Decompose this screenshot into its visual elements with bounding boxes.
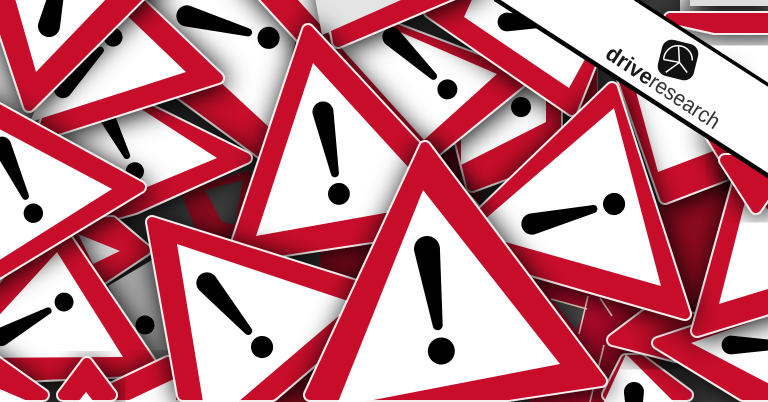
sign: upper centre with exclamation mark — [232, 30, 484, 258]
sign: small red rounded tips — [613, 312, 700, 356]
sign: band under banner with mark — [430, 0, 640, 110]
banner — [495, 0, 768, 177]
sign: bottom right with mark — [658, 296, 768, 400]
sign: far top band — [310, 0, 480, 42]
sign: mark ten upper right of centre — [240, 0, 525, 165]
sign: top centre with exclamation mark — [70, 0, 345, 168]
sign: pointing right upper left — [30, 0, 218, 134]
icon: exclamation mark — [192, 268, 278, 363]
sign: grey back with dot — [108, 260, 175, 390]
icon: exclamation mark — [624, 382, 644, 402]
logo wordmark: driveresearch — [601, 40, 725, 134]
sign: big centre with exclamation mark — [310, 147, 601, 402]
sign: top right tip — [708, 130, 768, 208]
icon: exclamation mark — [0, 289, 77, 350]
icon: exclamation mark — [412, 234, 457, 366]
icon: exclamation mark — [174, 3, 282, 51]
sign: centre right with dot — [440, 50, 556, 186]
icon: exclamation mark — [50, 24, 126, 102]
sign: small right vertical band — [574, 56, 592, 112]
sign: lower left with exclamation mark — [0, 222, 155, 380]
sign: bottom left corner — [0, 336, 43, 402]
sign: centre left pointing right — [20, 50, 246, 240]
icon: exclamation mark — [519, 191, 627, 237]
sign: bottom band right of small sign — [105, 362, 195, 402]
icon: exclamation mark — [91, 97, 147, 184]
icon: exclamation mark — [498, 12, 591, 32]
sign: top right tip over far right — [725, 160, 768, 208]
icon: dot — [136, 316, 154, 334]
sign: bottom right small with mark — [604, 354, 687, 402]
icon: exclamation mark — [722, 335, 768, 355]
icon: dot — [511, 97, 531, 117]
sign: top right behind banner — [670, 0, 768, 28]
icon: exclamation mark — [310, 100, 352, 207]
icon: exclamation mark — [0, 133, 46, 226]
sign: pointing down upper left — [0, 0, 165, 106]
sign: right behind banner — [620, 70, 725, 198]
sign: small apex at bottom — [63, 363, 111, 402]
icon: exclamation mark — [35, 0, 82, 39]
icon: exclamation mark — [378, 23, 462, 103]
logo icon — [656, 38, 700, 82]
sign: right with exclamation mark — [448, 88, 685, 314]
sign: far right — [697, 158, 768, 331]
sign: small back band left — [72, 222, 145, 278]
sign: left pointing right — [0, 88, 140, 296]
sign: lower left centre with exclamation mark — [152, 222, 388, 402]
